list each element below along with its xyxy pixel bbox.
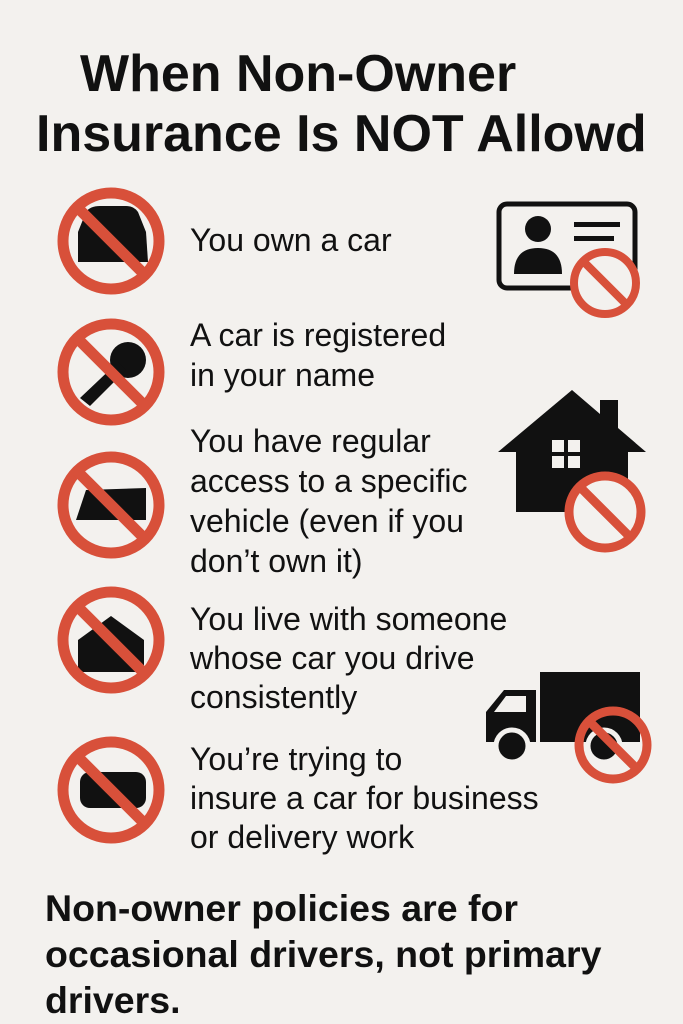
text: item 5: or delivery work: [190, 819, 414, 855]
icon: no car side: [63, 742, 159, 838]
icon: no key: [63, 324, 159, 420]
text: item 3: don’t own it): [190, 543, 363, 579]
title: [36, 45, 647, 163]
footer note: drivers.: [45, 979, 180, 1021]
text: item 5: [190, 741, 539, 855]
icon: no van: [63, 457, 159, 553]
icon: no car: [63, 193, 159, 289]
icon: ID card: [499, 204, 636, 314]
text: item 4: [190, 601, 507, 715]
icon: truck: [486, 672, 647, 779]
text: item 2: in your name: [190, 357, 375, 393]
text: item 5: insure a car for business: [190, 780, 539, 816]
text: item 4: consistently: [190, 679, 357, 715]
text: item 3: access to a specific: [190, 463, 467, 499]
text: item 1: You own a car: [190, 222, 392, 258]
text: item 3: vehicle (even if you: [190, 503, 464, 539]
text: item 3: [190, 423, 467, 579]
text: item 2: A car is registered: [190, 317, 446, 353]
footer note: Non-owner policies are for: [45, 887, 518, 929]
text: item 5: You’re trying to: [190, 741, 402, 777]
icon: no garage: [63, 592, 159, 688]
text: item 2: [190, 317, 446, 393]
icon: house: [498, 390, 646, 548]
footer note: [45, 887, 602, 1021]
text: item 4: You live with someone: [190, 601, 507, 637]
text: item 4: whose car you drive: [190, 640, 475, 676]
title: Insurance Is NOT Allowd: [36, 105, 647, 163]
footer note: occasional drivers, not primary: [45, 933, 601, 975]
text: item 3: You have regular: [190, 423, 431, 459]
title: When Non-Owner: [80, 45, 516, 103]
